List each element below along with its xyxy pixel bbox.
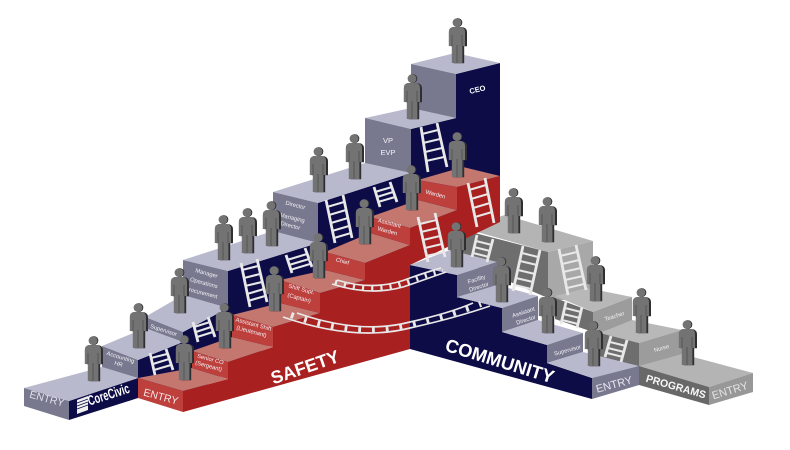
ladder: teacher to programs <box>559 245 586 295</box>
person: assistant warden upper <box>403 165 421 210</box>
label: Shift Supt.: Shift Supt. <box>288 284 315 296</box>
person: manager 3 <box>263 201 281 246</box>
panel: corporate navy staircase <box>24 53 500 420</box>
label: Chief: Chief <box>335 257 350 267</box>
ladder: entry to nurse <box>605 336 627 362</box>
label: red ENTRY: ENTRY <box>142 387 179 407</box>
label: Facility Director: Facility <box>467 274 486 286</box>
ladder: upper curved bridge <box>332 268 446 291</box>
label: Assistant Warden: Warden <box>377 226 398 237</box>
label: Assistant Director: Assistant <box>512 306 536 320</box>
person: warden <box>449 132 467 177</box>
person: community entry <box>585 321 603 366</box>
ladder: to supervisor <box>193 317 215 342</box>
label: Shift Supt.: (Captain) <box>287 293 311 305</box>
person: assistant director <box>493 257 511 302</box>
person: programs top 2 <box>539 197 557 242</box>
panel: programs staircase <box>463 215 753 405</box>
logo: CoreCivic: CoreCivic <box>86 380 132 408</box>
person: community supervisor <box>539 288 557 333</box>
label: Manager Operations Procurement: Operations <box>189 277 218 290</box>
label: Facility Director: Director <box>469 282 490 294</box>
ladder: shift to manager <box>286 248 312 273</box>
person: CEO <box>449 18 467 63</box>
ladder: to director <box>326 195 352 243</box>
label: COMMUNITY: COMMUNITY <box>443 334 557 387</box>
ladder: lower curved bridge <box>283 303 490 333</box>
person: nurse <box>679 320 697 365</box>
label: Assistant Shift: (Lieutenant) <box>236 325 267 339</box>
logo: CoreCivic <box>77 380 132 414</box>
ladder: to manager <box>241 259 267 307</box>
label: Assistant Warden: Assistant <box>377 218 402 230</box>
label: Director Managing Director: Director <box>285 201 306 211</box>
ladder: supervisor to teacher <box>561 302 582 328</box>
person: procurement <box>171 268 189 313</box>
ladder: assistant director to programs <box>513 246 540 295</box>
person: assistant shift <box>216 303 234 348</box>
label: Warden: Warden <box>425 190 446 201</box>
label: Manager Operations Procurement: Manager <box>194 268 218 280</box>
person: manager 1 <box>215 215 233 260</box>
person: facility director <box>448 222 466 267</box>
label: Accounting HR: HR <box>113 361 123 369</box>
label: Supervisor: Supervisor <box>149 324 177 338</box>
label: VP EVP: VP <box>383 136 393 145</box>
panel: community navy staircase <box>410 250 639 399</box>
ladder: facility to programs <box>472 235 493 262</box>
person: senior CO <box>176 335 194 380</box>
person: teacher upper <box>587 256 605 301</box>
label: Assistant Director: Director <box>516 315 537 327</box>
panel: safety red staircase <box>138 167 500 412</box>
label: CEO: CEO <box>468 83 487 96</box>
person: chief <box>310 233 328 278</box>
label: Director Managing Director: Director <box>280 221 301 232</box>
label: Director Managing Director: Managing <box>279 213 305 225</box>
label: Senior CO: (Sergeant) <box>194 360 223 373</box>
person: VP <box>404 74 422 119</box>
ladder: to warden <box>468 178 494 227</box>
person: manager 2 <box>239 208 257 253</box>
person: director 2 <box>346 134 364 179</box>
label: Senior CO: Senior CO <box>196 354 225 367</box>
person: shift supt <box>266 266 284 311</box>
person: assistant warden <box>356 199 374 244</box>
ladder: warden to director <box>374 182 397 207</box>
person: programs top 1 <box>505 188 523 233</box>
ladder: to VP <box>421 123 447 172</box>
label: community Supervisor: Supervisor <box>554 345 582 358</box>
label: navy ENTRY: ENTRY <box>28 389 65 409</box>
label: gray ENTRY: ENTRY <box>711 380 750 402</box>
label: Nurse: Nurse <box>653 344 670 354</box>
label: community ENTRY: ENTRY <box>595 374 634 396</box>
label: Assistant Shift: Assistant Shift <box>235 317 272 333</box>
label: VP EVP: EVP <box>380 148 396 157</box>
label: PROGRAMS: PROGRAMS <box>644 373 707 401</box>
label: Teacher: Teacher <box>604 311 625 323</box>
ladder: community to assistant warden <box>418 213 445 262</box>
person: teacher <box>633 288 651 333</box>
person: director 1 <box>310 147 328 192</box>
person: supervisor <box>130 303 148 348</box>
ladder: red entry to navy <box>150 349 173 375</box>
label: Manager Operations Procurement: Procurement <box>184 286 218 301</box>
label: SAFETY: SAFETY <box>268 346 342 388</box>
person: accounting <box>85 336 103 381</box>
label: Accounting HR: Accounting <box>106 351 135 365</box>
